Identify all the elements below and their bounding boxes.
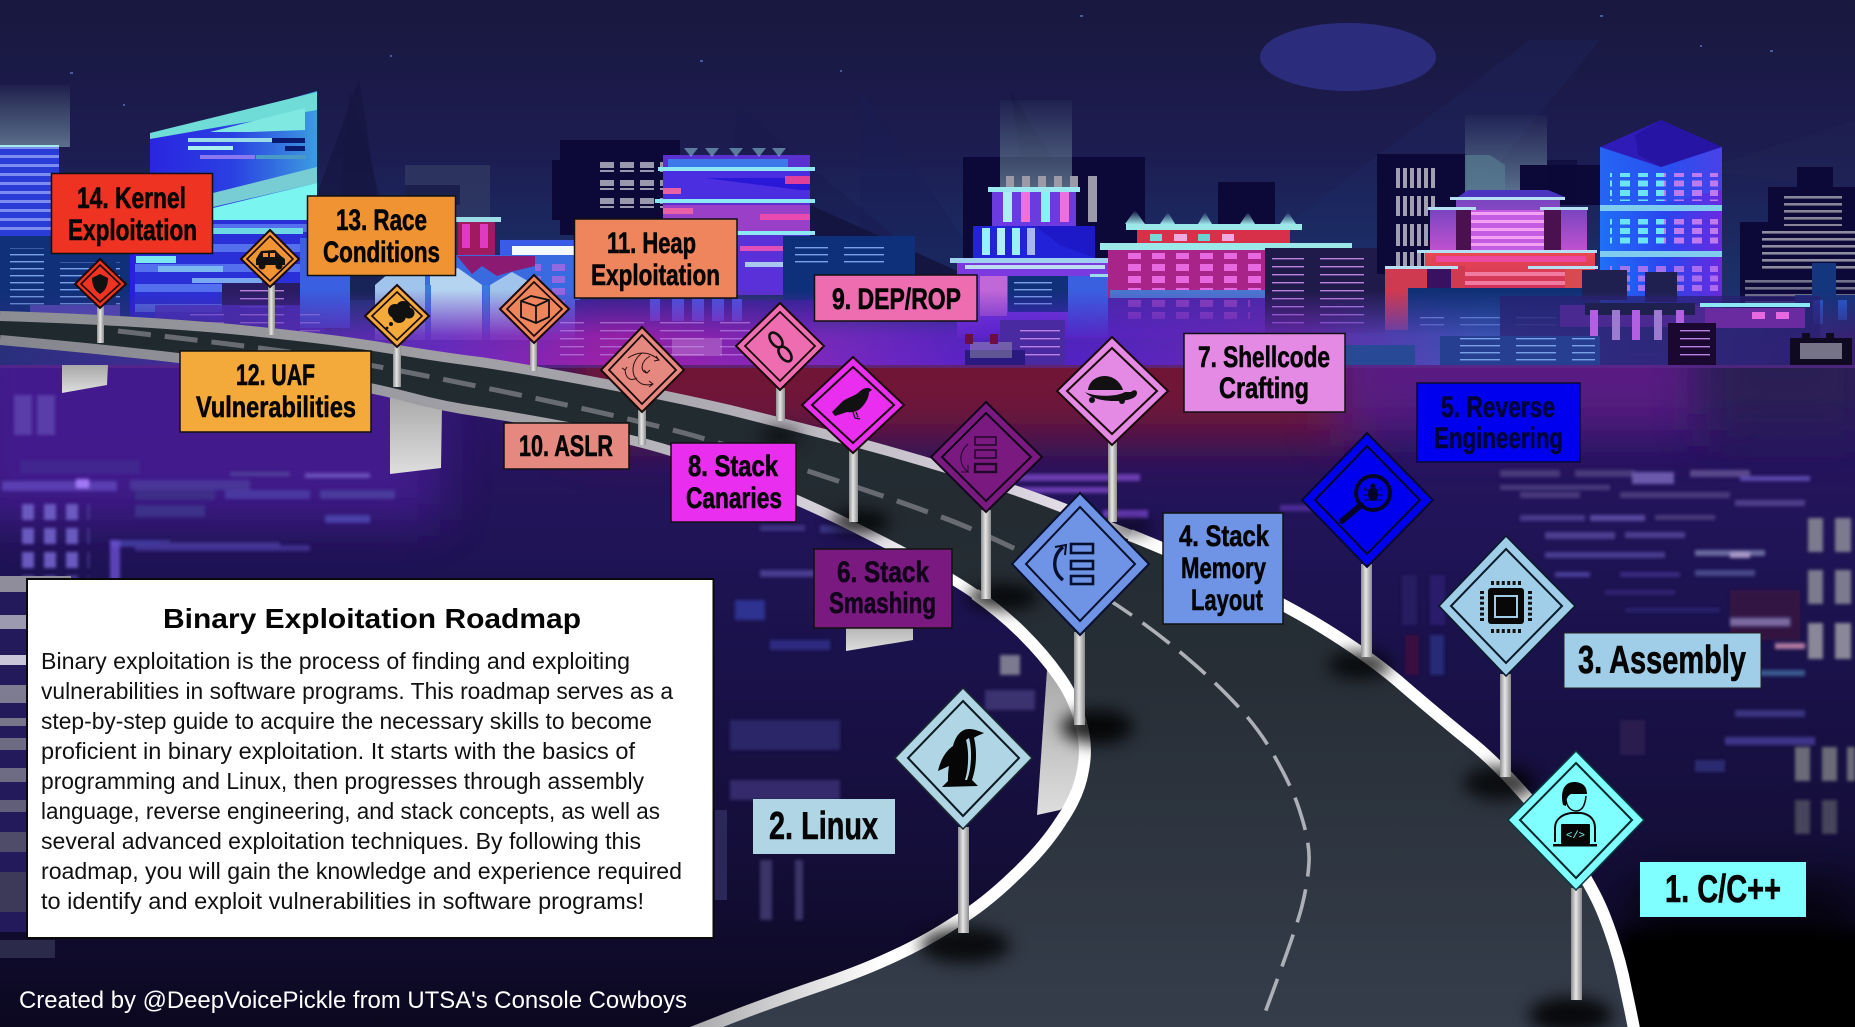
label 6: Smashing xyxy=(829,587,936,620)
sign 7: shellcode turtle xyxy=(1057,337,1168,522)
label 11: 11. Heap xyxy=(607,227,696,260)
sign 9: DEP/ROP chain xyxy=(736,303,824,421)
label 13: Conditions xyxy=(323,236,440,269)
searchlight wedges and stars xyxy=(0,15,1855,310)
label 12: 12. UAF xyxy=(236,359,315,392)
label 8 xyxy=(671,443,796,522)
label 2: 2. Linux xyxy=(769,805,878,848)
label 6: 6. Stack xyxy=(837,556,929,589)
label 7: 7. Shellcode xyxy=(1198,341,1330,374)
label 1 xyxy=(1640,862,1806,917)
panel body text: several advanced exploitation techniques. By following this xyxy=(41,828,641,854)
label 6 xyxy=(814,549,952,628)
label 14: Exploitation xyxy=(68,214,197,247)
panel body text: programming and Linux, then progresses through assembly xyxy=(41,768,644,794)
label 9: 9. DEP/ROP xyxy=(832,283,961,316)
sign 1: C/C++ programmer xyxy=(1508,751,1644,1000)
panel body text: roadmap, you will gain the knowledge and experience required xyxy=(41,858,682,884)
sign 10: ASLR arrows xyxy=(601,327,684,445)
label 14 xyxy=(52,174,212,254)
label 2 xyxy=(753,799,895,854)
sign 6: stack smashing xyxy=(931,402,1042,599)
label 4: Layout xyxy=(1191,584,1263,617)
background sky xyxy=(0,0,1855,370)
sign 3: assembly chip xyxy=(1439,536,1575,777)
label 10 xyxy=(504,423,629,469)
label 7: Crafting xyxy=(1219,372,1309,405)
skyline: centre-left buildings xyxy=(300,105,1000,340)
road xyxy=(0,316,1636,1027)
panel body text: Binary exploitation is the process of finding and exploiting xyxy=(41,648,630,674)
credit line: Created by @DeepVoicePickle from UTSA's Console Cowboys xyxy=(19,987,687,1014)
label 5: 5. Reverse xyxy=(1441,391,1555,424)
bridge pillars xyxy=(62,365,1085,815)
label 14: 14. Kernel xyxy=(77,182,186,215)
label 13 xyxy=(308,196,456,276)
label 8: Canaries xyxy=(686,482,782,515)
label 8: 8. Stack xyxy=(688,450,778,483)
lower reflection background xyxy=(0,310,1855,1027)
sign 14: kernel exploitation xyxy=(75,259,126,343)
blurred city reflection lines xyxy=(2,395,1855,920)
label 3 xyxy=(1564,633,1761,688)
panel body text: vulnerabilities in software programs. This roadmap serves as a xyxy=(41,678,673,704)
label 7 xyxy=(1184,334,1345,412)
panel body text: language, reverse engineering, and stack concepts, as well as xyxy=(41,798,660,824)
label 9 xyxy=(814,275,977,321)
sign 12: UAF thought cloud xyxy=(365,285,429,387)
skyline: left buildings xyxy=(0,80,490,335)
left edge window strips xyxy=(0,576,727,958)
panel title: Binary Exploitation Roadmap xyxy=(163,603,581,634)
label 5 xyxy=(1417,383,1580,462)
sign 8: stack canaries bird xyxy=(802,357,904,522)
sign 13: race conditions car xyxy=(241,230,299,335)
sign 1: C/C++ programmer: </> xyxy=(1566,830,1585,842)
skyline: foreground low-rise strip xyxy=(0,290,1855,366)
label 5: Engineering xyxy=(1434,422,1563,455)
sign 2: linux penguin xyxy=(895,688,1032,933)
sign 5: reverse engineering magnifier xyxy=(1302,433,1433,657)
sign 4: stack memory layout xyxy=(1012,493,1149,725)
skyline: centre buildings xyxy=(950,100,1385,338)
label 12: Vulnerabilities xyxy=(196,391,356,424)
label 13: 13. Race xyxy=(336,204,427,237)
label 4: 4. Stack xyxy=(1179,520,1269,553)
moon xyxy=(1260,23,1436,91)
intro text panel xyxy=(27,579,714,938)
sign 11: heap cube xyxy=(500,275,569,371)
label 11 xyxy=(574,219,737,298)
label 11: Exploitation xyxy=(591,259,720,292)
label 3: 3. Assembly xyxy=(1578,639,1746,682)
panel body text: step-by-step guide to acquire the necessary skills to become xyxy=(41,708,652,734)
label 1: 1. C/C++ xyxy=(1665,868,1781,911)
label 10: 10. ASLR xyxy=(519,430,613,463)
label 4 xyxy=(1163,513,1283,624)
panel body text xyxy=(41,648,682,914)
panel body text: proficient in binary exploitation. It starts with the basics of xyxy=(41,738,636,764)
skyline: right buildings xyxy=(1377,115,1855,343)
label 4: Memory xyxy=(1181,552,1266,585)
panel body text: to identify and exploit vulnerabilities in software programs! xyxy=(41,888,644,914)
sign shadows xyxy=(760,428,1613,1027)
label 12 xyxy=(180,351,371,432)
